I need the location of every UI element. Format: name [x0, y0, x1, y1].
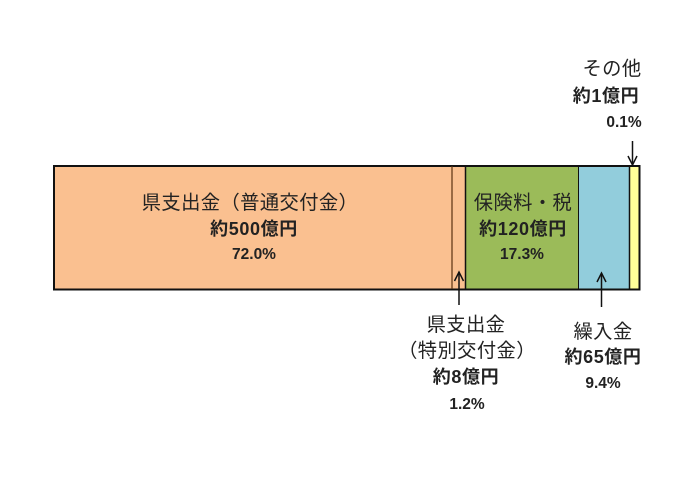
- stacked bar chart: [54, 166, 640, 290]
- arrow: prefectural disbursement (special): [454, 272, 464, 305]
- arrow: other: [628, 141, 637, 165]
- label: transfers: [564, 321, 642, 392]
- label: prefectural disbursement (ordinary): [142, 192, 358, 263]
- segment: insurance premiums and tax: [465, 166, 578, 289]
- label: other: 約1億円: [573, 86, 639, 106]
- label: insurance premiums and tax: 保険料・税: [474, 192, 572, 214]
- segment: prefectural disbursement (ordinary): [54, 166, 452, 289]
- label: other: 0.1%: [606, 114, 642, 131]
- label: other: その他: [582, 58, 642, 80]
- label: insurance premiums and tax: [474, 192, 572, 263]
- label: transfers: 約65億円: [564, 347, 642, 367]
- label: prefectural disbursement (special): 県支出金: [427, 314, 505, 336]
- label: prefectural disbursement (ordinary): 約500億円: [210, 219, 298, 239]
- label: insurance premiums and tax: 約120億円: [479, 219, 567, 239]
- arrow: transfers: [597, 273, 606, 307]
- segment: transfers: [578, 166, 630, 289]
- segment: prefectural disbursement (special): [452, 166, 465, 289]
- label: prefectural disbursement (ordinary): 県支出金（普通交付金）: [142, 192, 358, 214]
- label: prefectural disbursement (special): 約8億円: [433, 367, 499, 387]
- label: transfers: 9.4%: [585, 375, 621, 392]
- bar outline and dividers: [54, 166, 640, 290]
- label: transfers: 繰入金: [573, 321, 633, 343]
- label: prefectural disbursement (ordinary): 72.0%: [232, 246, 276, 263]
- label: prefectural disbursement (special): [398, 314, 536, 413]
- segment: other: [630, 166, 639, 289]
- label: other: [573, 58, 642, 131]
- label: prefectural disbursement (special): （特別交付金）: [398, 340, 536, 362]
- label: insurance premiums and tax: 17.3%: [500, 246, 544, 263]
- label: prefectural disbursement (special): 1.2%: [449, 396, 485, 413]
